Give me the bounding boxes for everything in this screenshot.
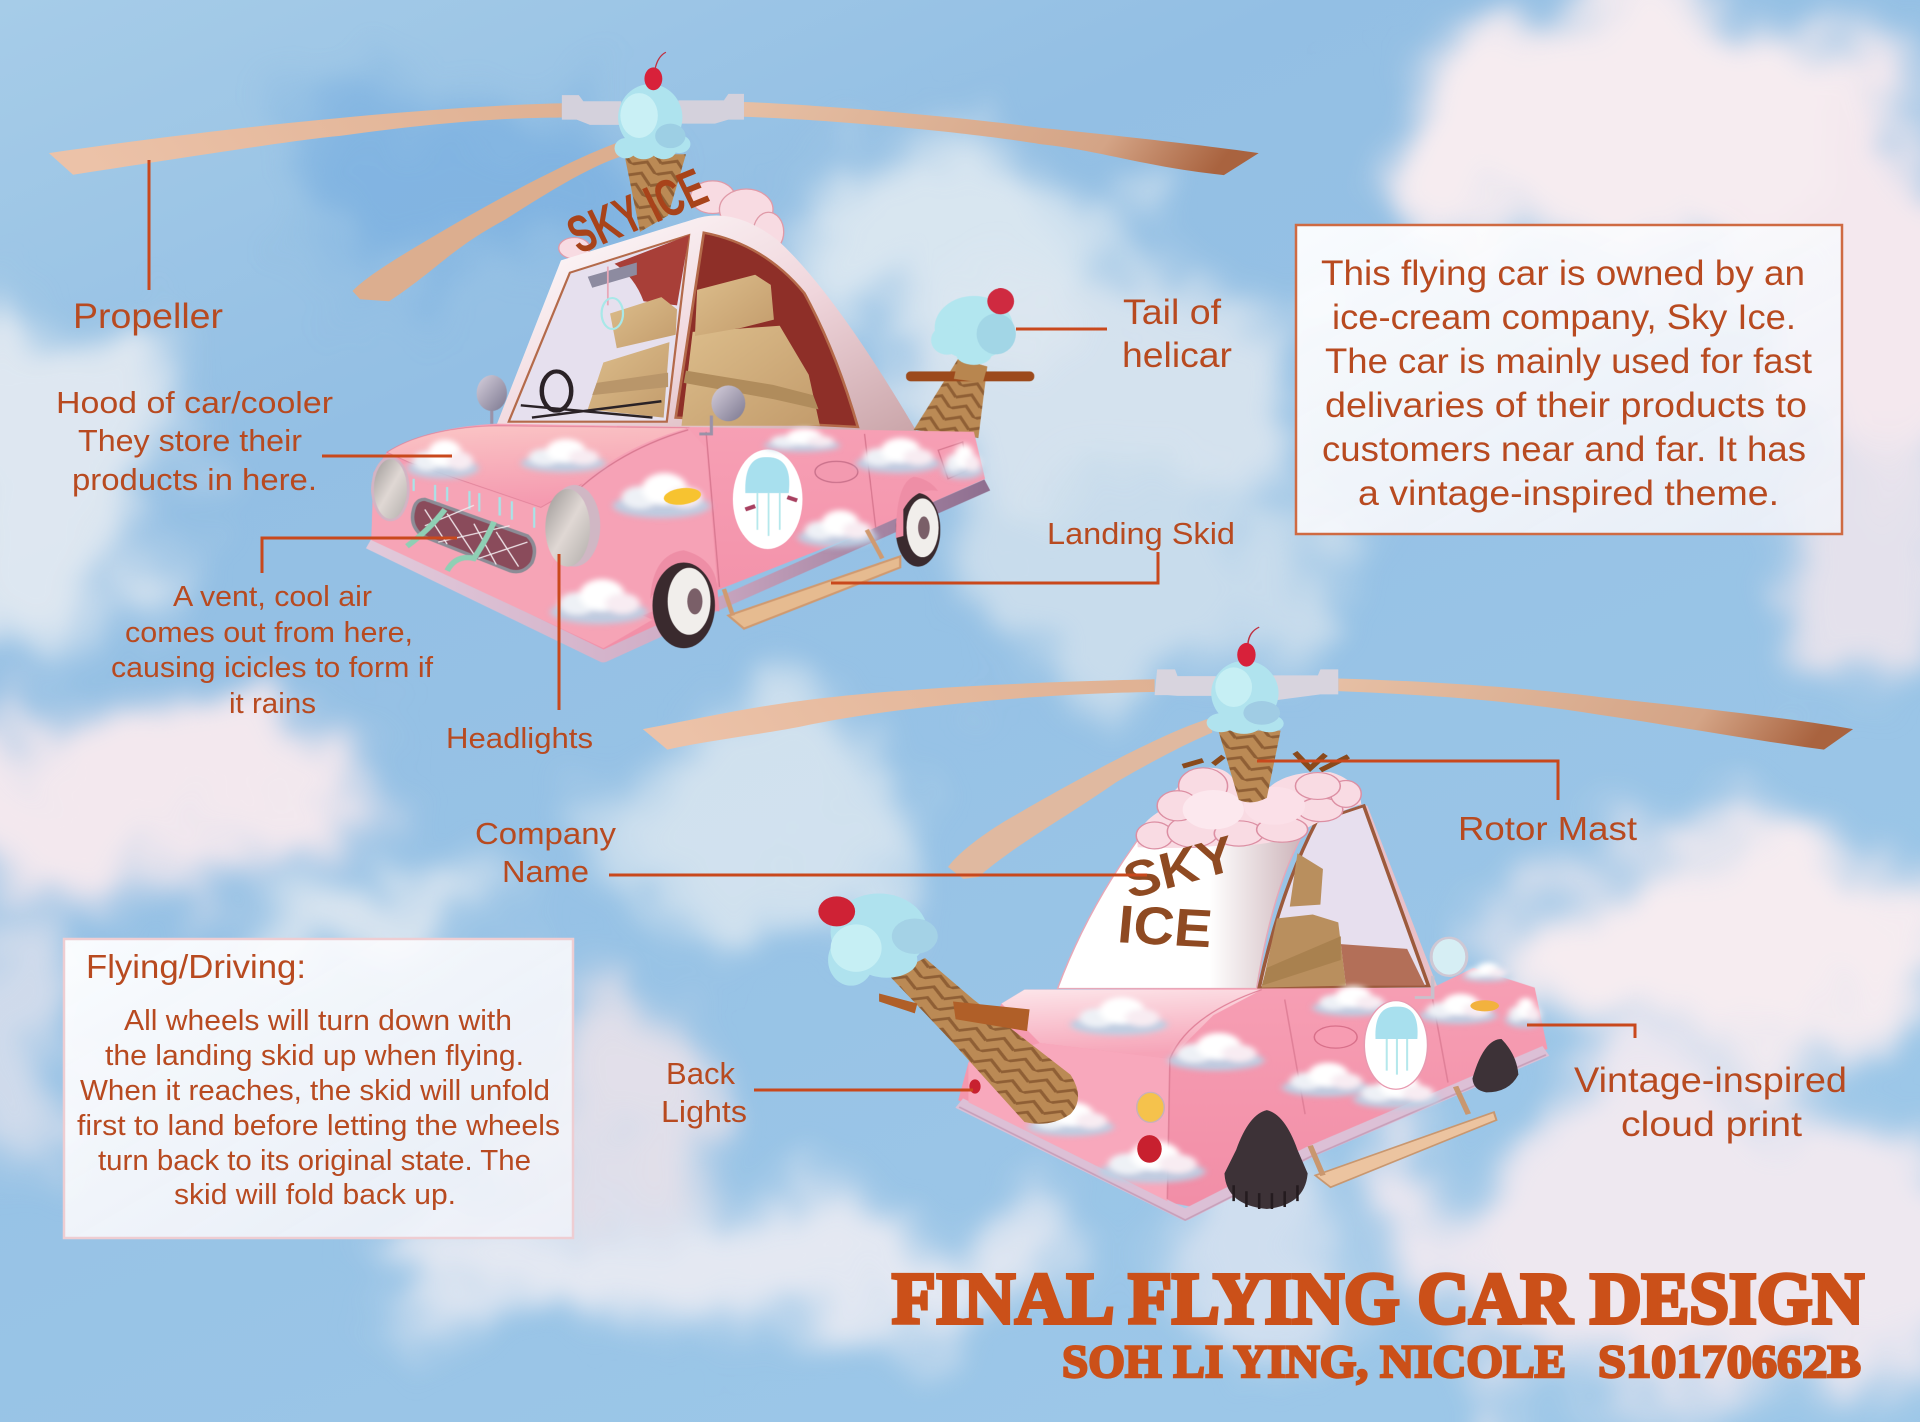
landing skid: [724, 530, 900, 629]
leader lines: [149, 160, 1635, 1090]
orange lamp: [1470, 1000, 1499, 1011]
label: vent: comes out from here,: [125, 617, 413, 649]
door handle: [1314, 1026, 1357, 1048]
panel: description: customers near and far. It has: [1322, 430, 1806, 469]
chocolate letters behind cone: [1183, 752, 1348, 770]
tail cone: [889, 958, 1078, 1124]
label: tail of helicar: [1122, 293, 1232, 375]
side mirror: [1415, 938, 1467, 998]
label: vent: [111, 581, 434, 720]
rotor mast cone: [624, 154, 686, 232]
panel: description: a vintage-inspired theme.: [1358, 474, 1779, 513]
front grille: [413, 499, 534, 572]
label: back lights: Back: [666, 1056, 735, 1091]
label: hood of car: products in here.: [72, 462, 317, 497]
icicles: [414, 479, 534, 528]
cloud prints: [1027, 963, 1544, 1183]
title: FINAL FLYING CAR DESIGN: [892, 1258, 1864, 1339]
cloud prints: [407, 428, 984, 624]
boxes: [588, 275, 820, 426]
rotor mast cone: [1218, 731, 1281, 802]
cherry: [1237, 627, 1259, 667]
turn signal: [663, 486, 702, 507]
tail stabiliser: [879, 994, 1030, 1031]
rotor hub arms: [1155, 669, 1338, 701]
label: hood of car: Hood of car/cooler: [56, 385, 333, 420]
side window: [676, 233, 858, 427]
label: cloud print: Vintage-inspired: [1574, 1061, 1847, 1100]
tail scoop: [828, 894, 938, 986]
label: company name: [475, 816, 617, 889]
propeller blade left: [49, 103, 562, 175]
rear panel: [968, 1043, 1170, 1201]
rotor hub arms: [562, 94, 744, 125]
frozen drips: [407, 509, 494, 571]
panel: description: ice-cream company, Sky Ice.: [1332, 298, 1796, 337]
panel: description: [1296, 225, 1842, 534]
propeller blade back: [352, 142, 621, 301]
rear door window: [938, 442, 967, 479]
cabin pillar: [1359, 804, 1438, 988]
subtitle: author and ID: [1062, 1336, 1861, 1388]
bumper: [369, 485, 987, 656]
ice cream scoop: [1207, 661, 1284, 734]
landing skid: [1310, 1086, 1496, 1187]
label: back lights: [661, 1056, 747, 1129]
label: rotor mast: Rotor Mast: [1458, 810, 1637, 847]
label: back lights: Lights: [661, 1094, 747, 1129]
left headlight: [373, 458, 408, 520]
tail cherry: [818, 896, 855, 926]
label: vent: A vent, cool air: [173, 581, 372, 613]
label: tail of helicar: helicar: [1122, 336, 1232, 375]
label: cloud print: cloud print: [1621, 1105, 1802, 1144]
panel text: All wheels will turn down with: [124, 1005, 512, 1037]
company name on roof: SKY ICE: [558, 157, 716, 265]
subtitle: author and ID: S10170662B: [1598, 1336, 1861, 1388]
label: hood of car: [56, 385, 333, 497]
company name on cabin: [1112, 825, 1249, 959]
car body: [958, 963, 1547, 1220]
label: hood of car: They store their: [78, 423, 302, 458]
jellyfish decal: [1364, 1001, 1428, 1089]
car 2: rear view flying car: [643, 627, 1853, 1220]
panel text: turn back to its original state. The: [98, 1145, 531, 1177]
label: cloud print: [1574, 1061, 1847, 1144]
rear view mirror: [588, 262, 637, 329]
label: vent: it rains: [229, 688, 316, 720]
ice cream scoop: [615, 84, 690, 159]
panel text: [77, 1005, 560, 1211]
label: company name: Name: [502, 854, 589, 889]
panel heading: Flying/Driving:: [86, 948, 306, 985]
label: company name: Company: [475, 816, 617, 851]
hood: [387, 426, 688, 507]
propeller blade left: [643, 679, 1155, 750]
interior wall: [615, 235, 689, 305]
company name on cabin: SKY: [1112, 825, 1249, 909]
company name on cabin: ICE: [1115, 895, 1215, 959]
label: tail of helicar: Tail of: [1123, 293, 1221, 332]
panel text: first to land before letting the wheels: [77, 1110, 560, 1142]
subtitle: author and ID: SOH LI YING, NICOLE: [1062, 1336, 1566, 1388]
label: headlights: Headlights: [446, 723, 593, 755]
trunk lid: [1002, 990, 1262, 1059]
cherry: [644, 52, 666, 90]
rear wheel: [896, 477, 940, 567]
propeller blade right: [744, 102, 1259, 175]
tail of helicopter: [906, 288, 1034, 438]
roof cloud frill: [1136, 768, 1361, 849]
jellyfish decal: [733, 449, 802, 549]
bumper: [959, 1051, 1546, 1215]
panel: description: The car is mainly used for fast: [1325, 342, 1812, 381]
label: propeller: Propeller: [73, 297, 223, 336]
car body: [369, 424, 987, 656]
body lines: [1167, 990, 1448, 1199]
fender: [550, 428, 717, 628]
car cabin: [496, 215, 918, 434]
front wheel: [650, 550, 719, 648]
propeller blade back: [948, 718, 1212, 879]
right headlight: [545, 485, 600, 567]
panel: description: delivaries of their products to: [1325, 386, 1807, 425]
panel: flying and driving: [64, 939, 573, 1238]
label: vent: causing icicles to form if: [111, 652, 434, 684]
panel: description: This flying car is owned by an: [1321, 254, 1805, 293]
body lines: [581, 430, 876, 587]
label: landing skid: Landing Skid: [1047, 516, 1235, 551]
windshield: [509, 235, 689, 422]
wheels: [1224, 1039, 1518, 1209]
back lights: [969, 1079, 1164, 1163]
roof cloud frill: [559, 181, 784, 259]
cabin rear: [1058, 822, 1310, 988]
panel text: skid will fold back up.: [174, 1179, 456, 1211]
panel text: the landing skid up when flying.: [105, 1040, 524, 1072]
car 1: front view flying car: [49, 52, 1259, 656]
side mirrors: [477, 375, 745, 434]
propeller blade right: [1338, 679, 1853, 750]
front panel: [371, 462, 652, 648]
door handle: [815, 461, 858, 482]
steering wheel: [542, 371, 571, 411]
panel text: When it reaches, the skid will unfold: [80, 1075, 550, 1107]
wipers: [521, 401, 661, 418]
cabin window: [1259, 806, 1429, 988]
